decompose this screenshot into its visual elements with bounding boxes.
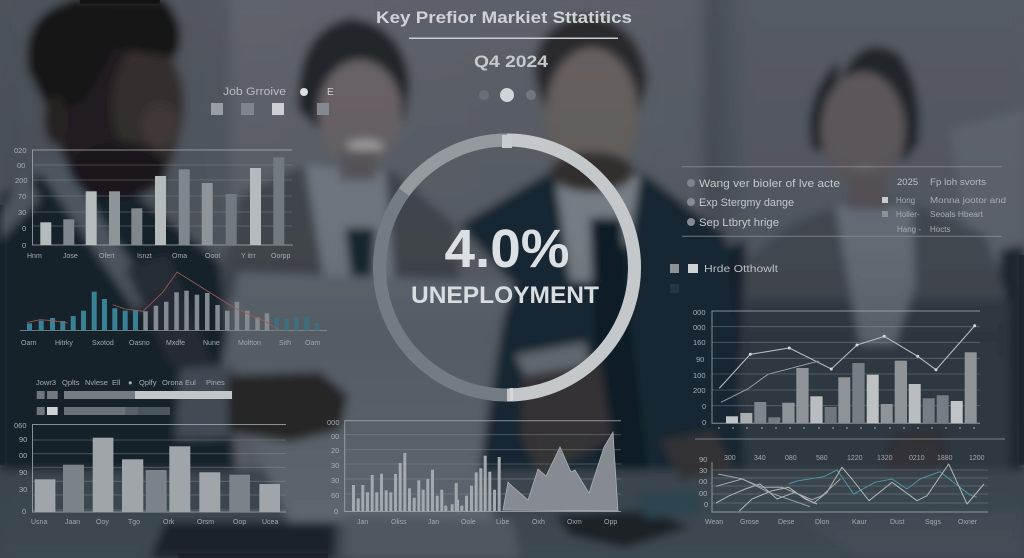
x axis labels: Oxner: [958, 519, 978, 526]
legend: top right: Hocts: [930, 225, 950, 234]
person 3: [460, 172, 745, 470]
x axis labels: [21, 340, 321, 347]
x axis ticks: [719, 427, 974, 429]
x axis labels: Oxh: [532, 519, 545, 526]
job growth legend: Job Grroive: [223, 86, 286, 98]
y axis labels: 00: [699, 477, 707, 486]
y axis labels: 20: [331, 446, 339, 455]
top value labels: 080: [785, 455, 797, 462]
x axis labels: Dese: [778, 519, 794, 526]
x axis labels: Hitrky: [55, 340, 73, 347]
y axis labels: 30: [331, 476, 339, 485]
y axis labels: [14, 146, 28, 250]
top value labels: 300: [724, 455, 736, 462]
y axis labels: 30: [331, 461, 339, 470]
job growth legend: E: [327, 87, 334, 98]
top value labels: 1320: [877, 455, 893, 462]
x axis labels: Jaan: [65, 519, 80, 526]
progress bars panel: Nvlese: [85, 378, 108, 387]
y axis labels: 000: [693, 308, 706, 317]
area series: [503, 432, 618, 511]
person 4: [640, 240, 760, 470]
y axis labels: 060: [14, 421, 27, 430]
top value labels: 580: [816, 455, 828, 462]
headline value: 4.0%: [444, 219, 570, 279]
x axis labels: Oma: [172, 253, 187, 260]
y axis labels: 200: [693, 386, 706, 395]
y axis labels: 00: [17, 161, 25, 170]
x axis labels: Oasno: [129, 340, 150, 347]
multi-line chart: bottom right: [695, 439, 1005, 526]
line series: [716, 464, 984, 511]
y axis labels: 30: [18, 208, 26, 217]
bar chart: top left: [14, 146, 293, 260]
top value labels: 1220: [847, 455, 863, 462]
person 1: [0, 165, 235, 470]
y axis labels: 0: [22, 507, 26, 516]
y axis labels: 60: [331, 491, 339, 500]
top value labels: 1880: [937, 455, 953, 462]
y axis labels: 000: [327, 418, 340, 427]
y axis labels: 30: [19, 485, 27, 494]
progress bars panel: Eul: [185, 378, 196, 387]
paper and hands: [220, 272, 515, 522]
job growth legend: [211, 86, 334, 115]
progress bars panel: [36, 378, 232, 415]
top value labels: [724, 455, 985, 462]
x axis labels: Dust: [890, 519, 904, 526]
y axis labels: 90: [696, 355, 704, 364]
y axis labels: 90: [699, 455, 707, 464]
progress bars panel: Orona: [162, 378, 184, 387]
x axis labels: Hnm: [27, 253, 42, 260]
teal and grey column chart: [20, 272, 327, 347]
x axis labels: Ucea: [262, 519, 278, 526]
bar chart: bottom left: [14, 421, 286, 526]
progress bars panel: Pines: [206, 378, 225, 387]
progress bars panel: Qplts: [62, 378, 80, 387]
headline label: UNEPLOYMENT: [411, 282, 599, 309]
title block: [376, 8, 632, 71]
x axis labels: Ooot: [205, 253, 220, 260]
title text: Key Prefior Markiet Sttatitics: [376, 8, 632, 27]
x axis labels: Oliss: [391, 519, 407, 526]
legend: top right: Hang -: [897, 225, 921, 234]
y axis labels: 90: [19, 468, 27, 477]
x axis labels: Sqgs: [925, 519, 941, 526]
legend: top right: 2025: [897, 177, 918, 188]
x axis labels: Jose: [63, 253, 78, 260]
y axis labels: 00: [331, 432, 339, 441]
legend: top right: Hong: [896, 196, 915, 205]
x axis labels: Kaur: [852, 519, 867, 526]
x axis labels: Isnzt: [137, 253, 152, 260]
y axis labels: 0: [22, 241, 26, 250]
x axis labels: Sith: [279, 340, 291, 347]
x axis labels: Opp: [604, 519, 617, 526]
legend: top right: Sep Ltbryt hrige: [699, 217, 779, 229]
y axis labels: 200: [15, 176, 28, 185]
x axis labels: Wean: [705, 519, 723, 526]
x axis labels: Orsm: [197, 519, 214, 526]
legend: top right: Holler-: [896, 210, 920, 219]
y axis labels: [693, 308, 706, 427]
x axis labels: Usna: [31, 519, 47, 526]
top value labels: 340: [754, 455, 766, 462]
y axis labels: 70: [18, 192, 26, 201]
y axis labels: 000: [693, 323, 706, 332]
person 2: [218, 165, 462, 300]
x axis labels: Dlon: [815, 519, 830, 526]
combo chart: right: [693, 308, 980, 429]
y axis labels: [14, 421, 27, 516]
x axis labels: Oop: [233, 519, 246, 526]
x axis labels: Grose: [740, 519, 759, 526]
top value labels: 0210: [909, 455, 925, 462]
x axis labels: Jan: [357, 519, 368, 526]
legend: top right: Monna jootor and: [930, 196, 1006, 205]
y axis labels: 0: [22, 224, 26, 233]
legend: hiring outlook: Hrde Otthowlt: [704, 264, 778, 275]
legend: hiring outlook: [670, 264, 778, 293]
x axis labels: Oxm: [567, 519, 582, 526]
x axis labels: Nune: [203, 340, 220, 347]
y axis labels: 0: [702, 402, 706, 411]
legend: top right: Seoals Hbeart: [930, 210, 984, 219]
x axis labels: Sxotod: [92, 340, 114, 347]
y axis labels: [699, 455, 708, 509]
red trend line: [27, 272, 280, 331]
y axis labels: 0: [334, 507, 338, 516]
x axis labels: Tgo: [128, 519, 140, 526]
y axis labels: [327, 418, 340, 516]
y axis labels: 160: [693, 338, 706, 347]
x axis labels: [31, 519, 278, 526]
unemployment ring: [380, 135, 635, 401]
legend: top right: Exp Stergmy dange: [699, 197, 794, 209]
y axis labels: 00: [699, 489, 707, 498]
x axis labels: Oarn: [21, 340, 37, 347]
y axis labels: 90: [19, 435, 27, 444]
x axis labels: Oorpp: [271, 253, 291, 260]
x axis labels: [357, 519, 617, 526]
bar and area chart: bottom middle: [327, 418, 621, 526]
y axis labels: 30: [699, 466, 707, 475]
x axis labels: [27, 253, 291, 260]
progress bars panel: Jowr3: [36, 378, 56, 387]
progress bars panel: Ell: [112, 378, 121, 387]
progress bars panel: ●: [128, 378, 133, 387]
y axis labels: 00: [19, 451, 27, 460]
x axis labels: Y itrr: [241, 253, 256, 260]
legend: top right: Wang ver bioler of lve acte: [699, 178, 840, 190]
top value labels: 1200: [969, 455, 985, 462]
x axis labels: Oarn: [305, 340, 321, 347]
x axis labels: Libe: [496, 519, 509, 526]
pagination dots: [479, 88, 536, 102]
x axis labels: Jan: [428, 519, 439, 526]
legend: top right: [682, 167, 1006, 236]
x axis labels: Moltton: [238, 340, 261, 347]
x axis labels: Ork: [163, 519, 175, 526]
line series secondary: [721, 361, 819, 402]
y axis labels: 100: [693, 371, 706, 380]
x axis labels: Ofert: [99, 253, 115, 260]
line series primary: [719, 324, 976, 388]
x axis labels: Oole: [461, 519, 476, 526]
y axis labels: 020: [14, 146, 27, 155]
y axis labels: 0: [702, 418, 706, 427]
legend: top right: Fp loh svorts: [930, 177, 986, 188]
progress bars panel: Qplfy: [139, 378, 157, 387]
subtitle: Q4 2024: [474, 52, 549, 71]
x axis labels: Ooy: [96, 519, 109, 526]
x axis labels: Mxdfe: [166, 340, 185, 347]
y axis labels: 0: [704, 500, 708, 509]
x axis labels: [705, 519, 978, 526]
